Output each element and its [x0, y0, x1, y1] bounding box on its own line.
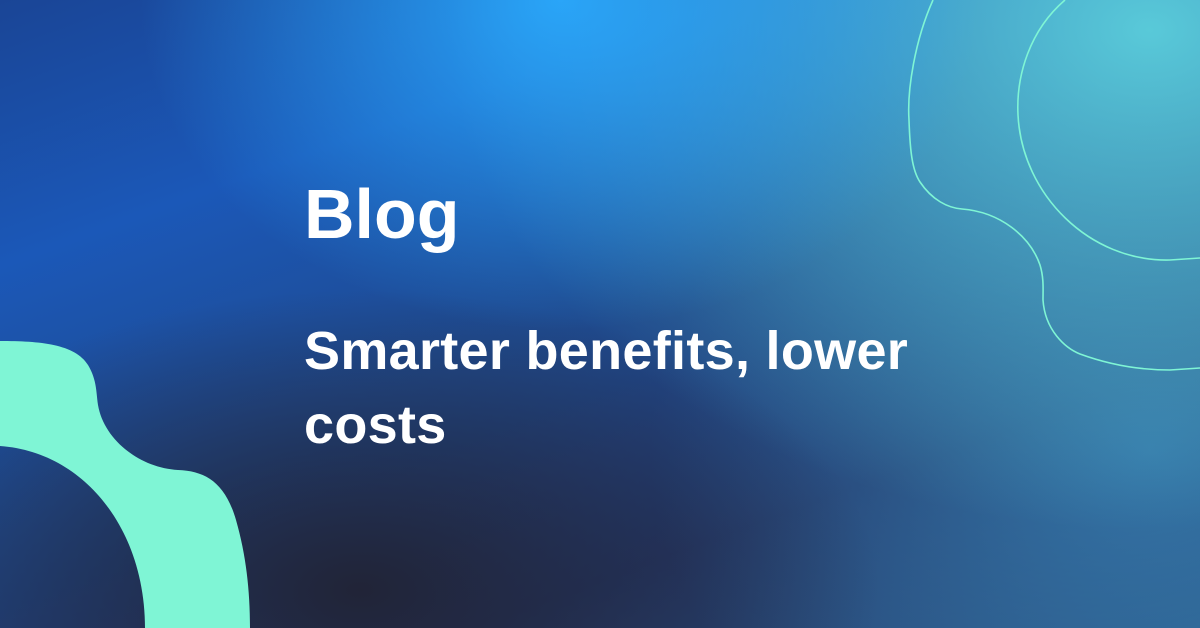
subtitle: costs [304, 395, 447, 455]
subtitle [304, 321, 908, 455]
heading: Blog: Blog [304, 175, 460, 253]
shape: outline rings top-right [909, 0, 1200, 370]
subtitle: Smarter benefits, lower [304, 321, 908, 381]
shape: mint gear bottom-left [0, 341, 250, 628]
